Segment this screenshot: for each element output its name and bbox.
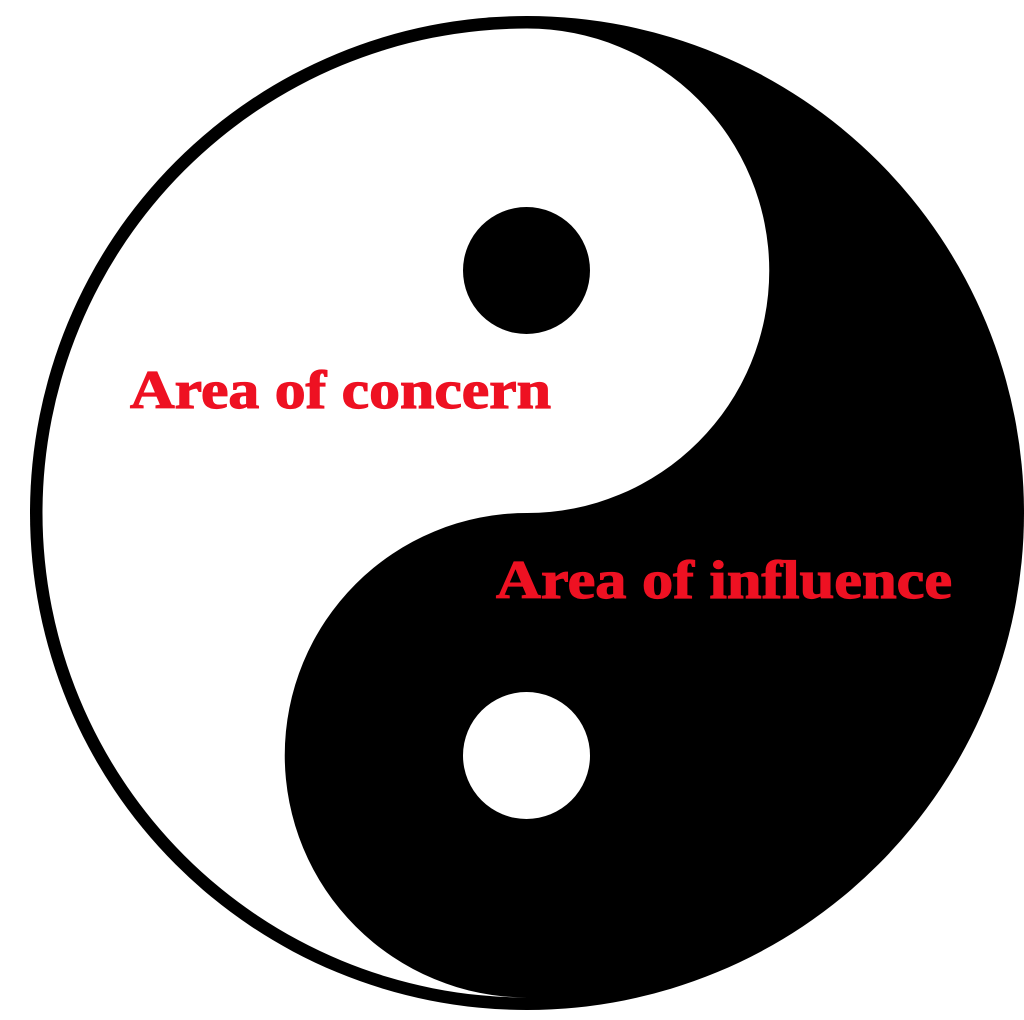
white dot xyxy=(463,692,590,819)
label: area of concern: Area of concern xyxy=(130,360,551,420)
label: area of influence: Area of influence xyxy=(496,550,952,610)
white yin region xyxy=(43,28,769,998)
black dot xyxy=(463,207,590,334)
